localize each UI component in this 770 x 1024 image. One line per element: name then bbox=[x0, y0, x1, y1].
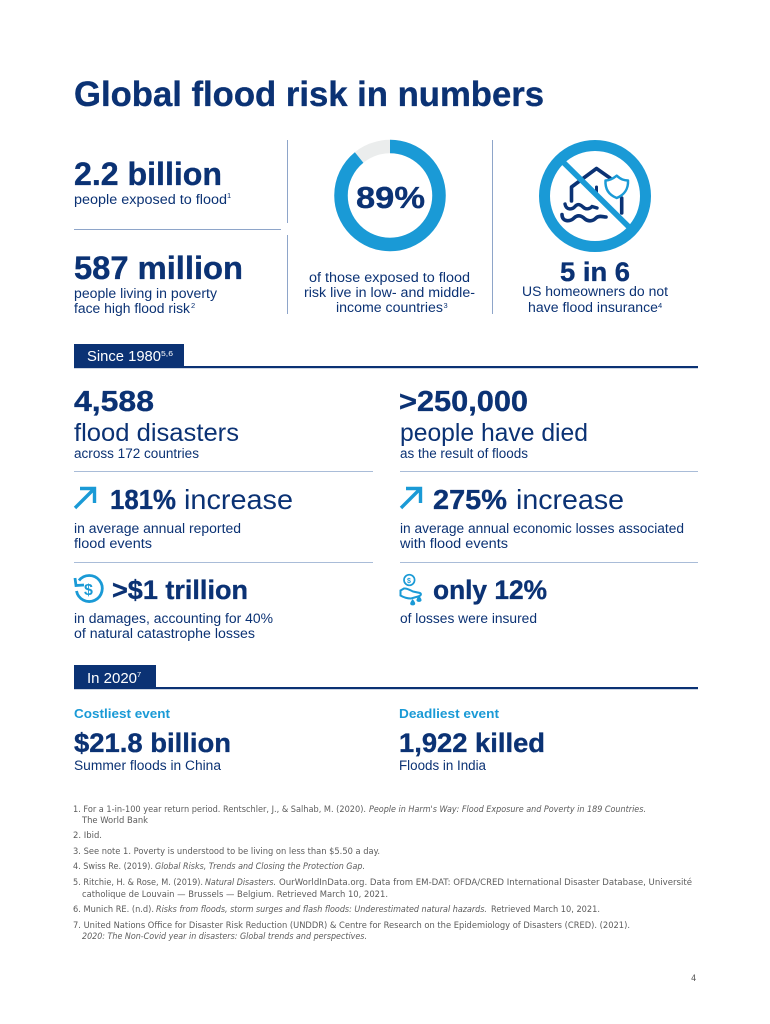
footnotes: catholique de Louvain — Brussels — Belgium. Retrieved March 10, 2021. bbox=[82, 889, 388, 899]
panel: costliest event bbox=[74, 706, 231, 773]
stat: 1,922 killed: 1,922 killed bbox=[399, 728, 545, 758]
footnotes: 4. Swiss Re. (2019). bbox=[73, 861, 153, 871]
panel: 5 in 6 uninsured bbox=[522, 146, 668, 315]
title: Global flood risk in numbers bbox=[74, 75, 544, 114]
text: damages: of natural catastrophe losses bbox=[74, 626, 255, 641]
text: economic losses: with flood events bbox=[399, 536, 508, 551]
label: flood disasters: flood disasters bbox=[74, 419, 239, 447]
label: deadliest event: Deadliest event bbox=[399, 706, 500, 721]
stat: 89%: 89% bbox=[356, 180, 425, 215]
footnotes bbox=[73, 804, 692, 941]
footnotes: 1. For a 1-in-100 year return period. Rentschler, J., & Salhab, M. (2020). bbox=[73, 804, 366, 814]
text: homeowners caption: US homeowners do not bbox=[522, 284, 668, 299]
icon: hand with coin and drops bbox=[400, 575, 422, 605]
footnotes: Natural Disasters. bbox=[205, 877, 276, 887]
panel: people exposed bbox=[74, 156, 231, 207]
footnotes: 7. United Nations Office for Disaster Risk Reduction (UNDDR) & Centre for Research on the Epidemiology of Disasters (CRED). (2021). bbox=[73, 920, 630, 930]
text: donut caption: 3 bbox=[444, 301, 448, 310]
panel: 275% increase bbox=[399, 484, 684, 551]
footnotes: Risks from floods, storm surges and flash floods: Underestimated natural hazards. bbox=[156, 904, 487, 914]
footnotes: People in Harm's Way: Flood Exposure and Poverty in 189 Countries. bbox=[369, 804, 646, 814]
text: economic losses: in average annual economic losses associated bbox=[400, 521, 684, 536]
text: reported events: flood events bbox=[74, 536, 152, 551]
stat: 181%: 181% bbox=[110, 484, 176, 515]
stat: 1 trillion: >$1 trillion bbox=[112, 575, 248, 605]
text: high flood risk: face high flood risk bbox=[74, 301, 190, 316]
label: increase: increase bbox=[184, 484, 293, 515]
footnotes: 6. Munich RE. (n.d). bbox=[73, 904, 154, 914]
section heading: Since 1980: 5,6 bbox=[161, 349, 173, 358]
label: costliest event: Costliest event bbox=[74, 706, 171, 721]
text: donut caption: of those exposed to flood bbox=[309, 270, 470, 285]
footnote mark 2: 2 bbox=[191, 301, 195, 310]
text: China floods: Summer floods in China bbox=[74, 758, 221, 773]
footnotes: 3. See note 1. Poverty is understood to be living on less than $5.50 a day. bbox=[73, 846, 380, 856]
icon: dollar refresh bbox=[75, 575, 102, 601]
stat: 250,000: >250,000 bbox=[399, 386, 528, 418]
panel: 89 percent donut bbox=[304, 146, 475, 315]
stat: 2.2 billion: 2.2 billion bbox=[74, 156, 222, 192]
panel: 181% increase bbox=[74, 484, 293, 551]
footnotes: 5. Ritchie, H. & Rose, M. (2019). bbox=[73, 877, 203, 887]
text: economic losses bbox=[399, 521, 684, 551]
stat: 5 in 6: 5 in 6 bbox=[560, 257, 630, 287]
footnotes: OurWorldInData.org. Data from EM-DAT: OFDA/CRED International Disaster Database, Université bbox=[279, 877, 692, 887]
footnote mark 1: 1 bbox=[227, 191, 231, 200]
text: India floods: Floods in India bbox=[399, 758, 486, 773]
text: donut caption: income countries bbox=[336, 300, 443, 315]
text: result of floods: as the result of floods bbox=[400, 446, 528, 461]
panel: flood disasters bbox=[74, 386, 239, 461]
section heading: In 2020: 7 bbox=[137, 670, 141, 679]
icon: dollar refresh: $ bbox=[84, 582, 93, 599]
stat: 21.8 billion: $21.8 billion bbox=[74, 728, 231, 758]
footnotes: The World Bank bbox=[81, 815, 148, 825]
stat: 4,588: 4,588 bbox=[74, 386, 154, 418]
text: losses insured: of losses were insured bbox=[400, 611, 537, 626]
panel: 1 trillion damages bbox=[74, 575, 273, 641]
footnotes: Global Risks, Trends and Closing the Protection Gap. bbox=[155, 861, 365, 871]
text: homeowners caption bbox=[522, 284, 668, 315]
stat: only 12%: only 12% bbox=[433, 575, 547, 605]
section heading: In 2020 bbox=[74, 665, 698, 689]
panel: deadliest event bbox=[399, 706, 545, 773]
icon: hand with coin and drops: $ bbox=[407, 578, 411, 585]
text: people exposed: people exposed to flood bbox=[74, 192, 227, 207]
footnotes: Retrieved March 10, 2021. bbox=[491, 904, 600, 914]
label: increase: increase bbox=[516, 484, 624, 515]
section heading: In 2020: In 2020 bbox=[87, 670, 137, 687]
section heading: Since 1980 bbox=[74, 344, 698, 368]
text: reported events: in average annual reported bbox=[74, 521, 241, 536]
panel: people have died bbox=[399, 386, 588, 461]
panel: only 12% insured bbox=[400, 575, 547, 626]
text: donut caption bbox=[304, 270, 475, 315]
text: homeowners caption: have flood insurance bbox=[528, 300, 658, 315]
page number: 4 bbox=[691, 973, 696, 983]
text: damages: in damages, accounting for 40% bbox=[74, 611, 273, 626]
text: donut caption: risk live in low- and middle- bbox=[304, 285, 475, 300]
stat: 587 million: 587 million bbox=[74, 250, 243, 286]
text: across 172 countries: across 172 countries bbox=[74, 446, 199, 461]
panel: people in poverty bbox=[74, 250, 243, 316]
icon: rising arrow bbox=[75, 488, 94, 508]
text: damages bbox=[74, 611, 273, 641]
donut chart bbox=[341, 146, 439, 244]
section heading: Since 1980: Since 1980 bbox=[87, 348, 161, 365]
label: people have died: people have died bbox=[400, 419, 588, 447]
footnotes: 2020: The Non-Covid year in disasters: Global trends and perspectives. bbox=[82, 931, 367, 941]
icon: house flood no insurance bbox=[544, 146, 646, 246]
text: people in poverty: people living in poverty bbox=[74, 286, 217, 301]
text: homeowners caption: 4 bbox=[658, 301, 662, 310]
footnotes: 2. Ibid. bbox=[73, 830, 102, 840]
icon: rising arrow bbox=[401, 488, 420, 508]
text: reported events bbox=[74, 521, 241, 551]
stat: 275%: 275% bbox=[433, 484, 507, 515]
